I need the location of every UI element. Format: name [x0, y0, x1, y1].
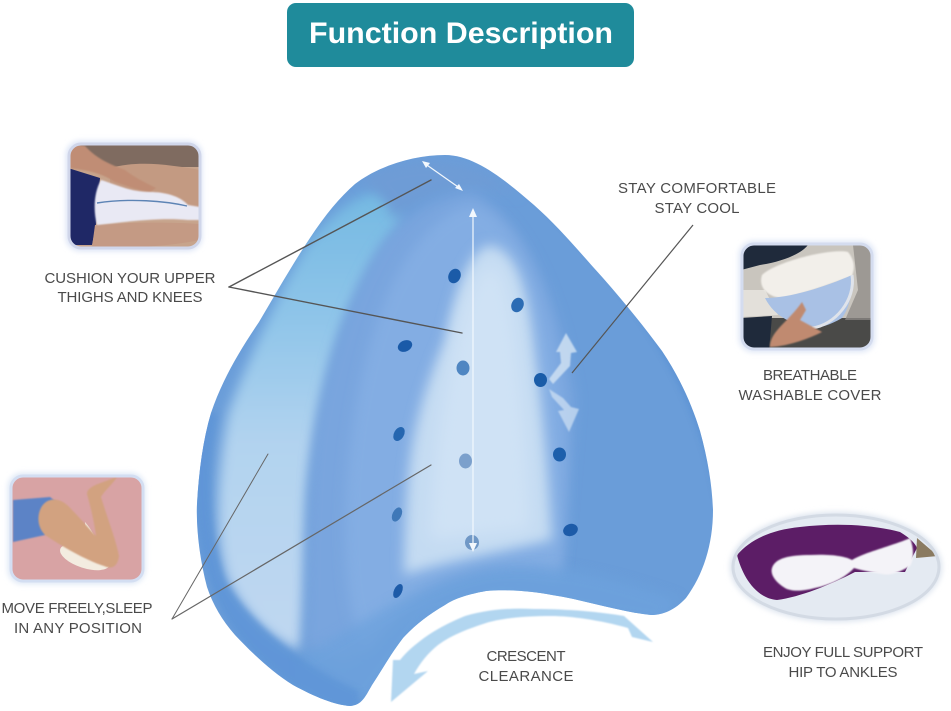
label: crescent clearance: CRESCENT	[486, 648, 566, 665]
label: full support: HIP TO ANKLES	[788, 664, 898, 681]
rim shade	[194, 413, 360, 710]
label: stay cool: STAY COMFORTABLE	[618, 180, 776, 197]
photo: hand on knee pillow	[66, 141, 202, 251]
inner arch ridge	[305, 192, 575, 665]
air flow arrows	[549, 333, 579, 432]
label: cushion: THIGHS AND KNEES	[58, 289, 202, 306]
label: washable cover: BREATHABLE	[763, 367, 857, 384]
inner panel	[350, 212, 566, 616]
thickness arrow	[422, 161, 463, 191]
label: washable cover: WASHABLE COVER	[738, 387, 882, 404]
label: full support: ENJOY FULL SUPPORT	[763, 644, 923, 661]
lower band shade	[300, 566, 680, 700]
photo: sleeping with leg pillow	[8, 473, 145, 584]
photo: washable cover	[739, 241, 875, 352]
leader lines: move freely	[172, 454, 431, 619]
label: stay cool: STAY COOL	[654, 200, 740, 217]
ventilation holes	[390, 267, 580, 599]
photo: full support oval	[730, 512, 950, 622]
crescent clearance arrow	[391, 609, 653, 702]
title: Function Description	[309, 17, 613, 50]
top cap tone	[360, 161, 520, 220]
centre light band	[404, 245, 552, 575]
leader lines: cushion	[229, 180, 462, 333]
label: move freely: MOVE FREELY,SLEEP	[2, 600, 152, 617]
height arrow	[469, 208, 477, 552]
title	[287, 3, 634, 67]
pillow diagram	[194, 146, 716, 710]
leader line: stay cool	[572, 225, 693, 373]
label: cushion: CUSHION YOUR UPPER	[44, 270, 216, 287]
band inner white	[436, 276, 524, 532]
label: move freely: IN ANY POSITION	[14, 620, 142, 637]
side strip highlight	[218, 190, 400, 650]
label: crescent clearance: CLEARANCE	[478, 668, 574, 685]
